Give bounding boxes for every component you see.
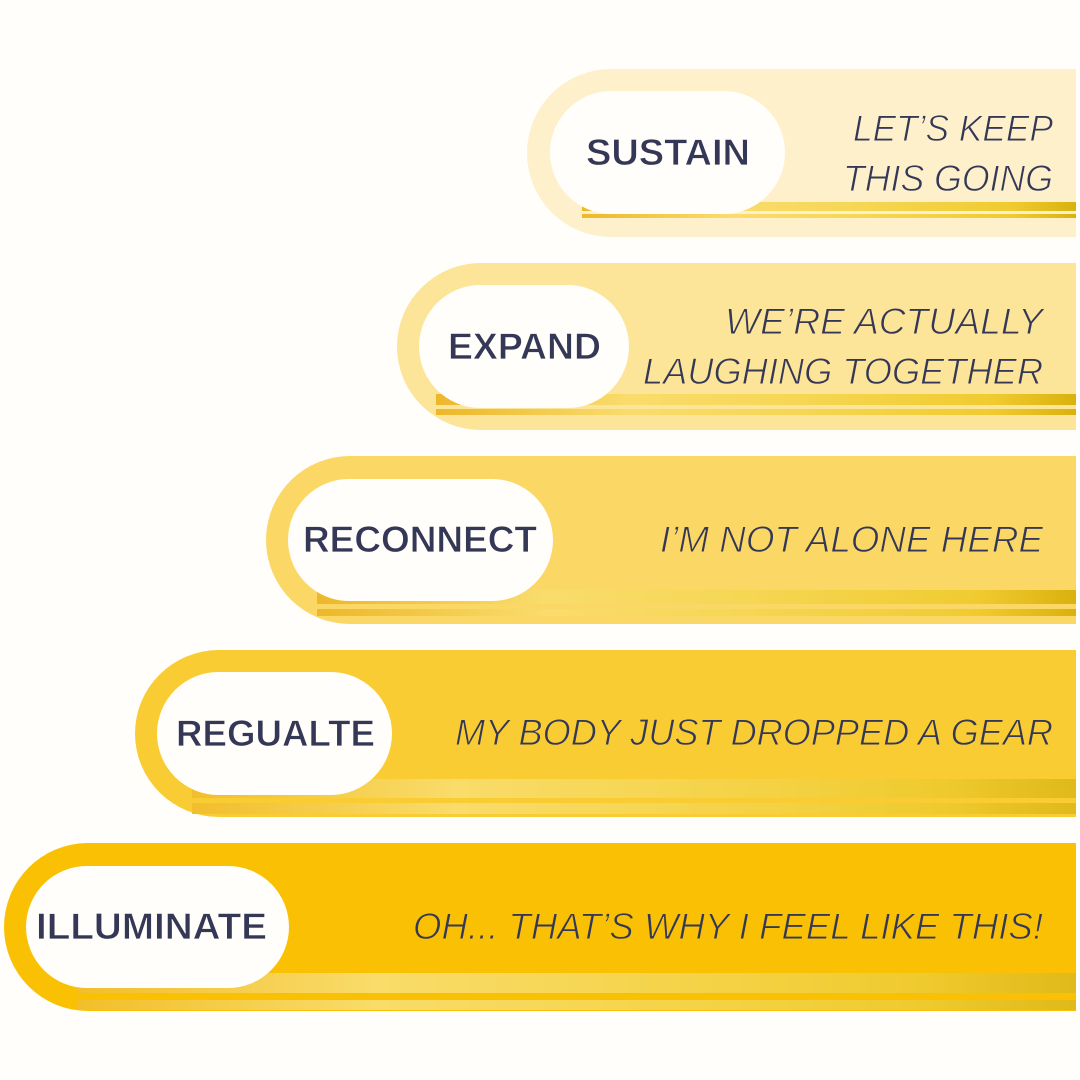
illuminate bar xyxy=(4,843,1076,1011)
expand label pill xyxy=(419,285,629,408)
regulate label: REGUALTE xyxy=(176,713,375,754)
reconnect bar xyxy=(266,456,1076,624)
illuminate label pill xyxy=(26,866,289,988)
panel: reconnect xyxy=(266,456,1076,624)
sustain quote: LET’S KEEP xyxy=(853,108,1053,149)
sustain label: SUSTAIN xyxy=(586,132,750,173)
panel: expand xyxy=(397,263,1076,430)
sustain label pill xyxy=(550,91,785,214)
expand quote xyxy=(643,301,1045,392)
sustain quote xyxy=(843,108,1053,199)
expand quote: WE’RE ACTUALLY xyxy=(725,301,1045,342)
regulate bar xyxy=(135,650,1076,817)
panel: sustain xyxy=(527,69,1076,237)
sustain gold stripes xyxy=(582,202,1076,218)
regulate label pill xyxy=(157,672,392,795)
illuminate gold stripes xyxy=(78,973,1076,1010)
panel: illuminate xyxy=(4,843,1076,1011)
reconnect label: RECONNECT xyxy=(303,519,537,560)
reconnect label pill xyxy=(288,479,553,601)
reconnect quote: I’M NOT ALONE HERE xyxy=(660,519,1044,560)
regulate gold stripes xyxy=(192,779,1076,814)
panel: regulate xyxy=(135,650,1076,817)
sustain quote: THIS GOING xyxy=(843,158,1053,199)
sustain bar xyxy=(527,69,1076,237)
expand bar xyxy=(397,263,1076,430)
reconnect gold stripes xyxy=(317,590,1076,616)
illuminate quote: OH... THAT’S WHY I FEEL LIKE THIS! xyxy=(413,906,1043,947)
expand gold stripes xyxy=(436,394,1076,415)
illuminate label: ILLUMINATE xyxy=(36,906,267,947)
expand quote: LAUGHING TOGETHER xyxy=(643,351,1043,392)
expand label: EXPAND xyxy=(448,326,601,367)
regulate quote: MY BODY JUST DROPPED A GEAR xyxy=(455,712,1053,753)
